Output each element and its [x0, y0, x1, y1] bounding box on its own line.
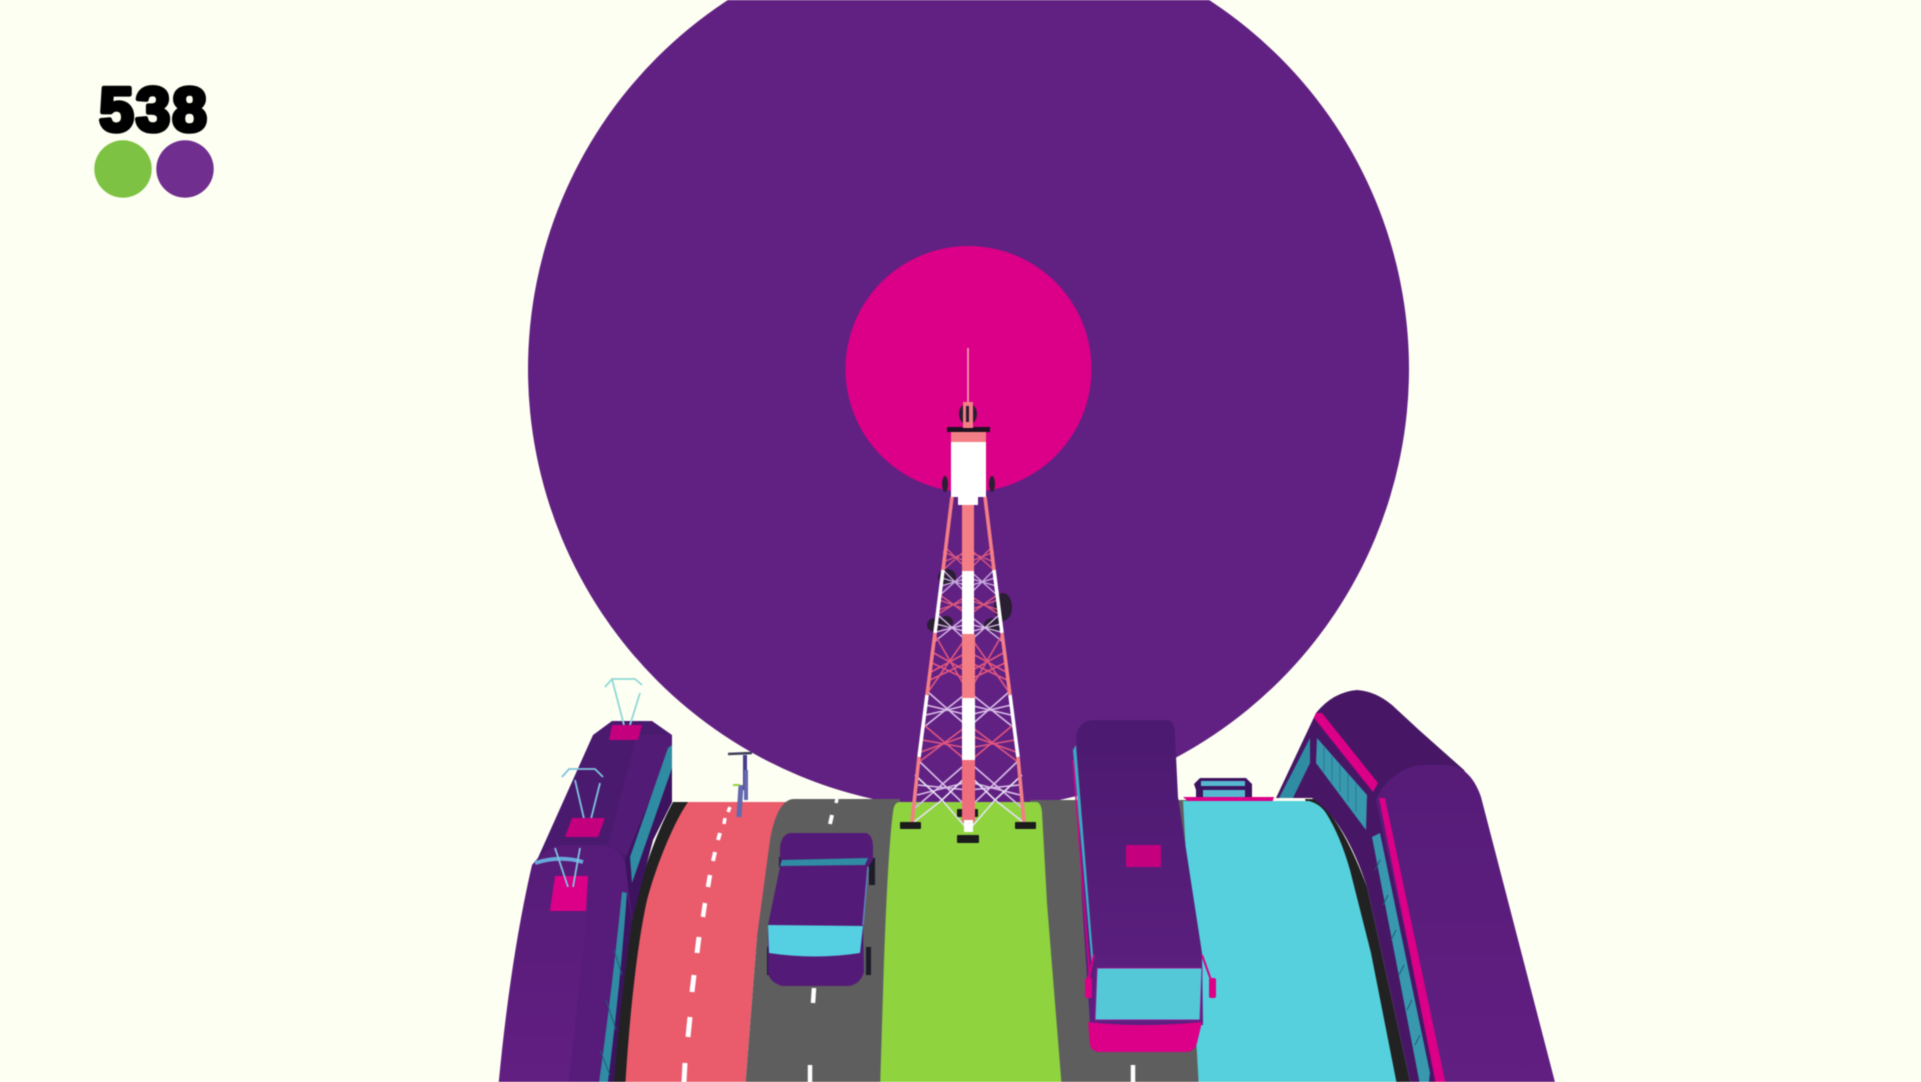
- car: [767, 833, 875, 986]
- tram right back: [1276, 690, 1481, 1082]
- bus front bumper: [1088, 1022, 1202, 1052]
- pantograph front: [535, 859, 583, 863]
- tower legs: [912, 497, 1024, 822]
- logo: 538: [94, 76, 214, 198]
- green central strip: [880, 802, 1062, 1082]
- bus mirrors: [1085, 978, 1092, 998]
- cyan road and black edge: [1183, 799, 1412, 1082]
- tower lattice: [914, 548, 1023, 830]
- transmission tower: [900, 348, 1036, 843]
- tram left front: [498, 845, 632, 1082]
- tower dishes: [927, 403, 1012, 632]
- car wheels: [767, 857, 875, 975]
- tower feet: [900, 809, 1036, 843]
- bus side window: [1073, 745, 1093, 968]
- cycle lane dashes: [684, 807, 730, 1082]
- bus windshield: [1095, 968, 1202, 1020]
- tram left back: [537, 679, 672, 920]
- bus far: [1183, 778, 1274, 803]
- tower cabin: [951, 442, 986, 505]
- right road: [1030, 800, 1205, 1082]
- logo: 538: 538: [99, 76, 209, 145]
- tram right front: [1372, 765, 1557, 1082]
- bus roof hatch: [1126, 845, 1161, 867]
- signal circle: inner pink: [846, 246, 1092, 492]
- pantograph back: [605, 679, 642, 725]
- pantograph middle: [562, 769, 603, 823]
- signal circle: outer purple: [528, 0, 1409, 810]
- left road dashes: [810, 799, 837, 1082]
- bus right: [1073, 720, 1216, 1052]
- cycle lane: [610, 802, 790, 1082]
- back bike: [728, 753, 752, 817]
- left road: [745, 799, 900, 1082]
- tower central column: [962, 505, 975, 832]
